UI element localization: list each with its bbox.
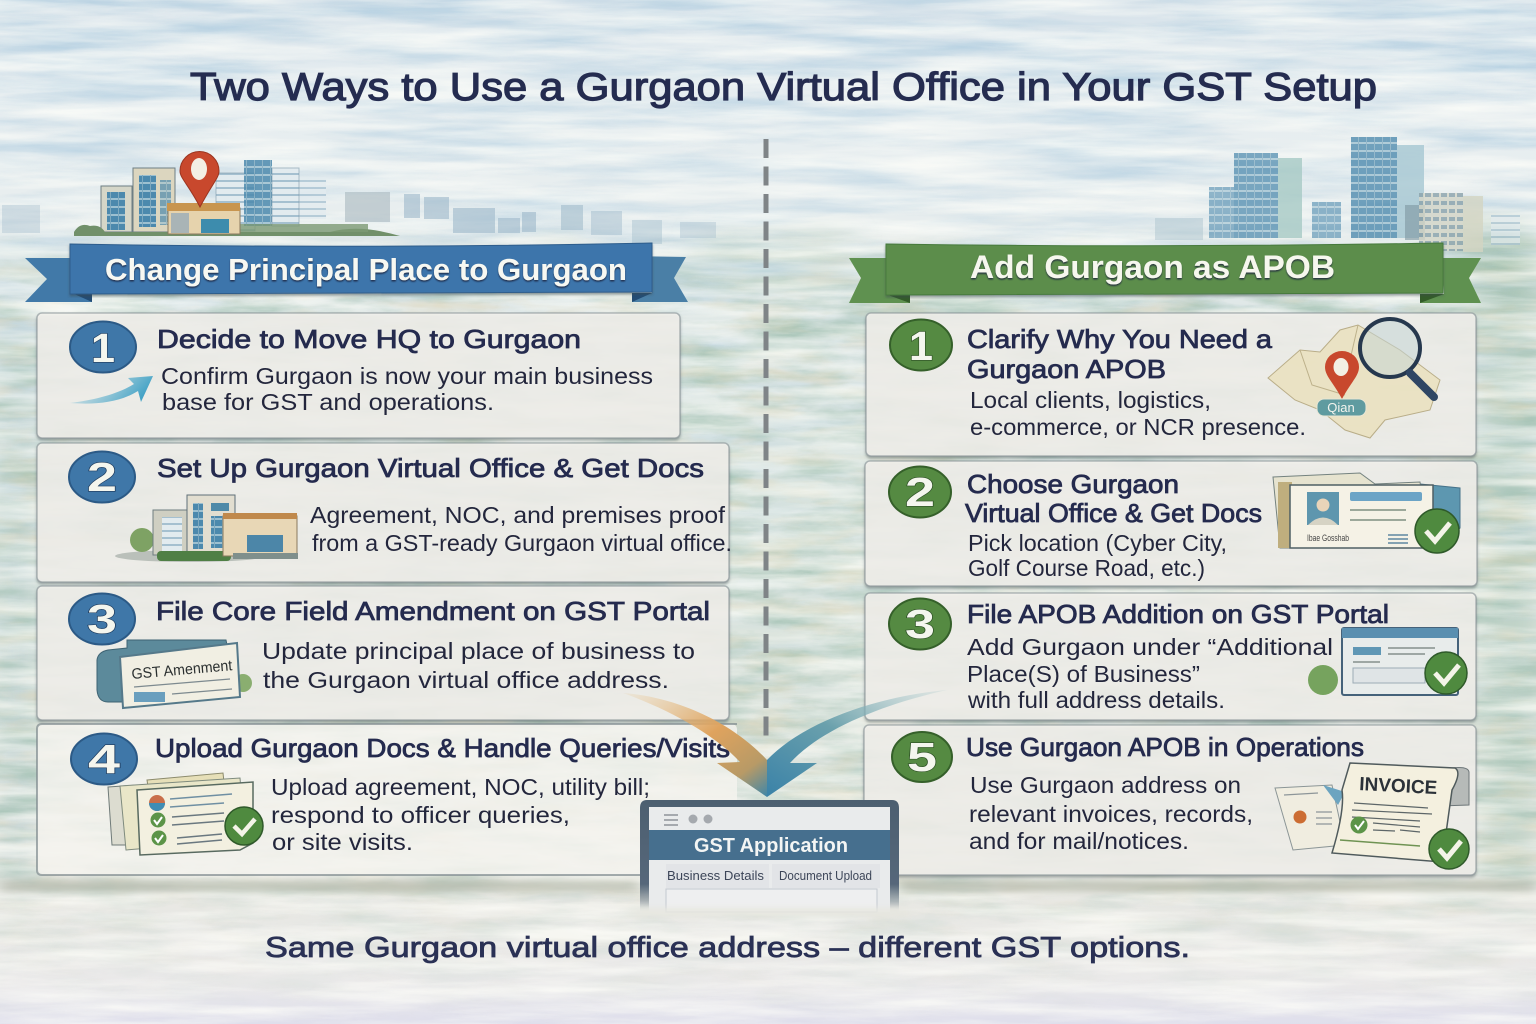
panel: right step 5 xyxy=(864,725,1476,875)
heading: step 2: Set Up Gurgaon Virtual Office & Get Docs xyxy=(157,453,704,483)
window tabs: Document Upload xyxy=(779,868,872,883)
badge: number 1 xyxy=(890,320,952,370)
icon: office building xyxy=(115,495,298,562)
text: step 4 body: or site visits. xyxy=(272,829,413,855)
text: step 2 body: Golf Course Road, etc.) xyxy=(968,555,1205,581)
panel: left step 1 xyxy=(37,313,680,438)
heading: step 2 second line: Virtual Office & Get Docs xyxy=(965,498,1262,528)
heading: step 1: Decide to Move HQ to Gurgaon xyxy=(157,324,581,354)
text: step 3 body: Place(S) of Business” xyxy=(967,661,1200,687)
text: step 1 body xyxy=(161,363,653,415)
window tabs xyxy=(666,864,880,888)
text: step 4 body: respond to officer queries, xyxy=(271,802,570,828)
text: step 5 body: and for mail/notices. xyxy=(969,828,1189,854)
badge: number 2 xyxy=(69,452,135,502)
text: step 2 body: Agreement, NOC, and premises proof xyxy=(310,502,726,528)
text: step 2 body xyxy=(968,530,1227,581)
badge: number 4: 4 xyxy=(88,736,120,782)
heading: step 5: Use Gurgaon APOB in Operations xyxy=(966,732,1364,762)
badge: number 5 xyxy=(892,732,952,782)
text: step 1 body: e-commerce, or NCR presence. xyxy=(970,414,1306,440)
badge: number 3: 3 xyxy=(87,596,117,642)
text: step 3 body xyxy=(967,634,1333,713)
text: step 4 body xyxy=(271,774,650,855)
badge: number 2: 2 xyxy=(905,469,935,515)
panel: left step 2 xyxy=(37,443,732,582)
window heading: GST Application xyxy=(694,835,848,857)
footer caption: Same Gurgaon virtual office address – different GST options. xyxy=(265,932,1190,964)
title: Two Ways to Use a Gurgaon Virtual Office in Your GST Setup xyxy=(190,66,1377,109)
badge: number 2: 2 xyxy=(87,454,117,500)
heading: step 3: File Core Field Amendment on GST Portal xyxy=(156,596,710,626)
badge: number 3: 3 xyxy=(905,601,935,647)
text: step 3 body xyxy=(262,638,695,693)
heading: step 1 second line: Gurgaon APOB xyxy=(967,354,1166,384)
text: step 3 body: Add Gurgaon under “Additional xyxy=(967,634,1333,660)
panel: right step 1 xyxy=(866,313,1476,456)
illustration: left skyline with location pin xyxy=(2,152,716,244)
heading: step 4: Upload Gurgaon Docs & Handle Queries/Visits xyxy=(155,733,730,763)
text: step 2 body: Pick location (Cyber City, xyxy=(968,530,1227,556)
icon: GST Amendment form xyxy=(97,640,252,708)
panel: right step 2 xyxy=(865,461,1477,586)
badge: number 5: 5 xyxy=(907,734,937,780)
center dashed divider xyxy=(764,139,768,740)
text: step 4 body: Upload agreement, NOC, utility bill; xyxy=(271,774,650,800)
icon: blue arrow xyxy=(70,376,153,404)
icon: map with pin and magnifier xyxy=(1268,319,1440,438)
badge: number 1 xyxy=(70,322,136,372)
icon: GST Amendment form: GST Amenment xyxy=(131,657,234,683)
banner: Add Gurgaon as APOB: Add Gurgaon as APOB xyxy=(970,249,1335,285)
arrow: teal from right panel xyxy=(767,690,947,797)
heading: step 3: File APOB Addition on GST Portal xyxy=(967,599,1389,629)
text: step 2 body xyxy=(310,502,732,556)
icon: invoice with check xyxy=(1275,763,1469,869)
illustration: right skyline buildings xyxy=(1155,137,1520,252)
badge: number 3 xyxy=(69,594,135,644)
panel: left step 3 xyxy=(37,586,729,720)
window tabs: Business Details xyxy=(667,868,764,883)
text: step 3 body: Update principal place of business to xyxy=(262,638,695,664)
badge: number 2 xyxy=(889,466,951,518)
text: step 1 body: Local clients, logistics, xyxy=(970,387,1211,413)
text: step 3 body: with full address details. xyxy=(967,687,1225,713)
banner: Change Principal Place to Gurgaon xyxy=(25,243,688,302)
icon: portal window with check xyxy=(1308,628,1467,695)
badge: number 1: 1 xyxy=(91,325,115,371)
badge: number 3 xyxy=(889,598,951,650)
banner: Change Principal Place to Gurgaon: Change Principal Place to Gurgaon xyxy=(105,252,627,287)
panel: right step 3 xyxy=(865,593,1476,720)
text: step 5 body xyxy=(969,772,1253,854)
heading: step 2: Choose Gurgaon xyxy=(967,469,1179,499)
panel: left step 4 xyxy=(37,724,737,875)
text: step 1 body xyxy=(970,387,1306,440)
heading: step 1: Clarify Why You Need a xyxy=(967,324,1273,354)
banner: Add Gurgaon as APOB xyxy=(849,243,1481,303)
text: step 5 body: Use Gurgaon address on xyxy=(970,772,1241,798)
icon: ID documents with check: Ibae Gosshab xyxy=(1307,533,1349,543)
icon: documents with check xyxy=(108,773,263,855)
icon: map with pin and magnifier: Qian xyxy=(1327,400,1355,415)
text: step 2 body: from a GST-ready Gurgaon virtual office. xyxy=(312,530,732,556)
icon: invoice with check: INVOICE xyxy=(1359,774,1438,799)
badge: number 4 xyxy=(71,734,137,784)
badge: number 1: 1 xyxy=(909,323,933,369)
text: step 3 body: the Gurgaon virtual office address. xyxy=(263,667,669,693)
GST application window xyxy=(630,800,910,916)
text: step 1 body: Confirm Gurgaon is now your main business xyxy=(161,363,653,389)
text: step 5 body: relevant invoices, records, xyxy=(969,801,1253,827)
text: step 1 body: base for GST and operations. xyxy=(162,389,494,415)
arrow: orange from left panel xyxy=(623,693,767,797)
icon: ID documents with check xyxy=(1273,473,1460,553)
